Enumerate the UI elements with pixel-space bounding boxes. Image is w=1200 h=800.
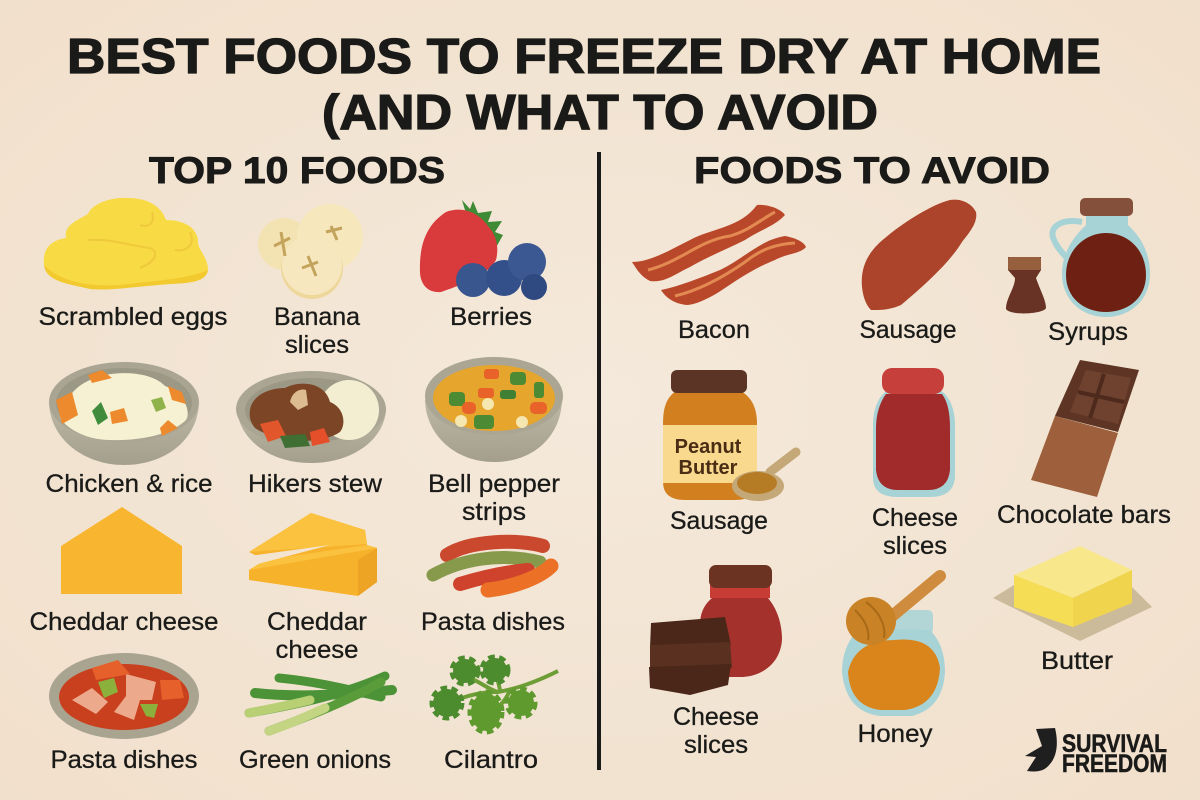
food: peanut butter jar bbox=[663, 370, 796, 535]
label bbox=[673, 703, 759, 759]
label bbox=[428, 470, 560, 526]
food: cheddar cheese slices bbox=[249, 513, 377, 664]
food: cilantro bbox=[433, 658, 558, 774]
label: peanut butter: Butter bbox=[679, 457, 738, 479]
food: banana slices bbox=[258, 204, 363, 359]
label: Scrambled eggs bbox=[38, 303, 227, 331]
label: Cheese bbox=[673, 703, 759, 731]
logo: survival freedom bbox=[1025, 728, 1167, 778]
label: cheese bbox=[276, 636, 358, 664]
label: Syrups bbox=[1048, 318, 1128, 346]
label: Butter bbox=[1041, 647, 1113, 675]
food: hikers stew bbox=[236, 371, 386, 498]
center divider bbox=[597, 152, 601, 770]
label: Chocolate bars bbox=[997, 501, 1171, 529]
label: Pasta dishes bbox=[50, 746, 198, 774]
label: strips bbox=[462, 498, 526, 526]
food: jam jar bbox=[872, 368, 958, 560]
label: Bell pepper bbox=[428, 470, 560, 498]
label: Cheddar bbox=[267, 608, 367, 636]
label: Cilantro bbox=[444, 746, 538, 774]
title: (AND WHAT TO AVOID bbox=[322, 86, 878, 140]
label: Cheddar cheese bbox=[30, 608, 218, 636]
label: slices bbox=[684, 731, 748, 759]
food: pepper strips bbox=[421, 542, 565, 636]
label: Green onions bbox=[239, 746, 391, 774]
label: peanut butter: Peanut bbox=[675, 436, 742, 458]
food: butter bbox=[993, 546, 1152, 675]
label: Hikers stew bbox=[248, 470, 383, 498]
label: slices bbox=[883, 532, 947, 560]
food: scrambled eggs bbox=[38, 198, 227, 331]
food: syrups bbox=[1006, 198, 1150, 346]
title: BEST FOODS TO FREEZE DRY AT HOME bbox=[67, 30, 1101, 84]
label: Banana bbox=[274, 303, 360, 331]
food: brownies and jar bbox=[649, 565, 782, 759]
heading: top 10 foods: TOP 10 FOODS bbox=[149, 150, 445, 191]
title bbox=[67, 30, 1101, 140]
food: berries bbox=[420, 200, 547, 331]
label: peanut butter bbox=[675, 436, 742, 479]
food: bacon bbox=[632, 205, 806, 344]
food: green onions bbox=[239, 676, 392, 774]
label: Pasta dishes bbox=[421, 608, 565, 636]
food: chicken and rice bbox=[46, 362, 212, 498]
label: Sausage bbox=[860, 316, 956, 344]
label bbox=[872, 504, 958, 560]
food: sausage bbox=[860, 200, 976, 344]
label: slices bbox=[285, 331, 349, 359]
food: chocolate bars bbox=[997, 360, 1171, 529]
label: Honey bbox=[858, 720, 933, 748]
label: Sausage bbox=[670, 507, 768, 535]
label bbox=[274, 303, 360, 359]
logo: survival freedom: FREEDOM bbox=[1062, 750, 1167, 778]
label: Cheese bbox=[872, 504, 958, 532]
food: pasta dishes bowl bbox=[49, 653, 199, 774]
logo: survival freedom: SURVIVAL bbox=[1062, 730, 1167, 758]
food: honey bbox=[842, 576, 945, 748]
food: bell pepper strips bbox=[425, 357, 563, 526]
label: Chicken & rice bbox=[46, 470, 212, 498]
food: cheddar cheese wedge bbox=[30, 507, 218, 636]
heading: foods to avoid: FOODS TO AVOID bbox=[694, 150, 1050, 191]
label: Bacon bbox=[678, 316, 750, 344]
label: Berries bbox=[450, 303, 532, 331]
label bbox=[267, 608, 367, 664]
